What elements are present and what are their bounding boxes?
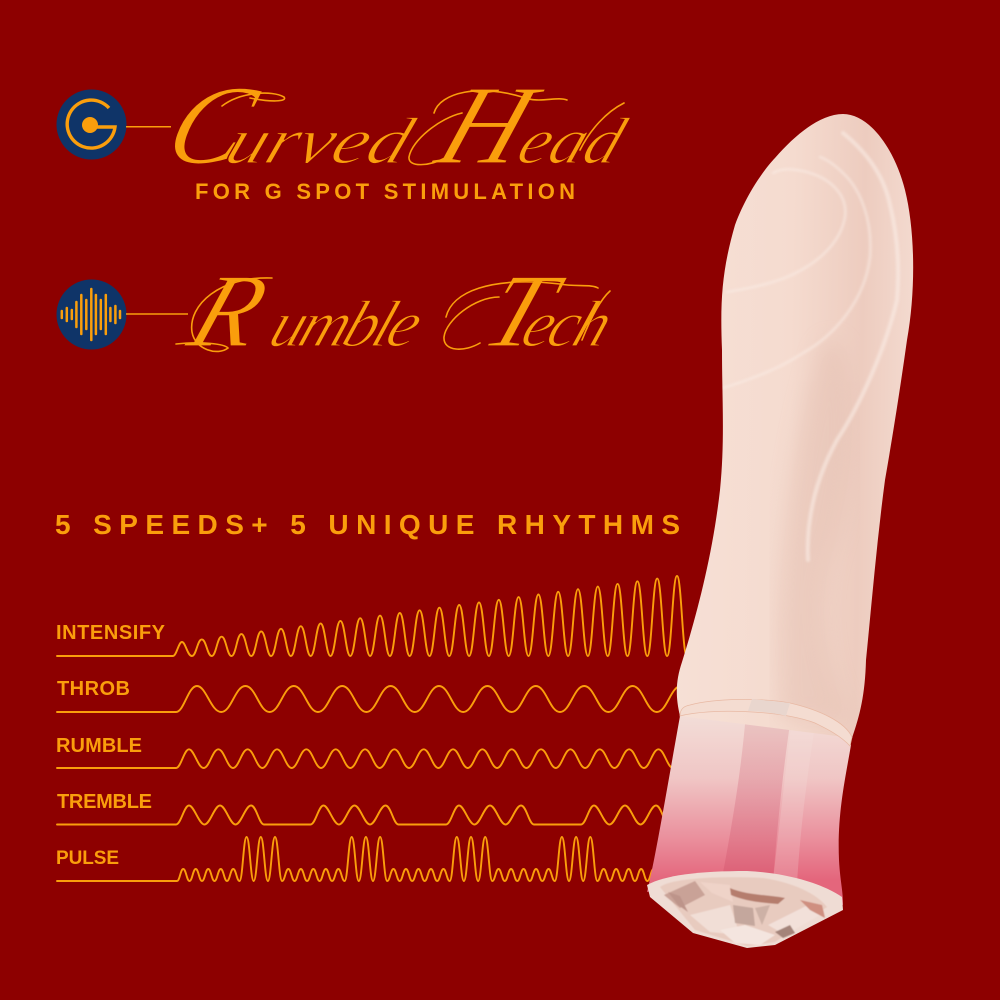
product collar: [680, 699, 852, 746]
waveform: rumble: [57, 749, 673, 768]
connector line: [126, 126, 171, 128]
feature: curved head: [56, 63, 651, 204]
chart: throb rhythm: [57, 678, 681, 712]
heading: Rumble Tech: ech: [513, 287, 624, 361]
label: pulse: PULSE: [56, 848, 119, 869]
heading: Rumble Tech: T: [470, 253, 577, 369]
chart: intensify rhythm: [56, 576, 687, 656]
product shaft: [677, 114, 913, 738]
icon: G spot badge: [56, 90, 126, 160]
heading: Rumble Tech: R: [175, 253, 282, 369]
heading: Rumble Tech: [175, 253, 636, 369]
icon: sound wave badge: [56, 280, 126, 350]
label: throb: THROB: [57, 678, 130, 700]
waveform: tremble: [57, 806, 669, 824]
chart: pulse rhythm: [56, 837, 660, 881]
waveform: intensify: [57, 576, 687, 656]
heading: Curved Head: H: [421, 63, 555, 188]
heading: Curved Head: urved: [217, 104, 425, 178]
chart: rumble rhythm: [56, 735, 673, 768]
label: tremble: TREMBLE: [57, 791, 152, 813]
label: rumble: RUMBLE: [56, 735, 142, 757]
gem end cap: [647, 871, 843, 948]
chart: tremble rhythm: [57, 791, 669, 824]
label: intensify: INTENSIFY: [56, 622, 166, 644]
heading: Curved Head: [151, 63, 651, 188]
waveform: throb: [57, 686, 681, 712]
product illustration: [647, 114, 913, 948]
heading: speeds and rhythms: 5 SPEEDS+ 5 UNIQUE RHYTHMS: [55, 509, 680, 540]
product base: [647, 709, 851, 905]
heading: Curved Head: ead: [509, 104, 636, 178]
subheading: FOR G SPOT STIMULATION: [195, 179, 575, 204]
connector line: [126, 313, 188, 315]
heading: Curved Head: C: [151, 63, 273, 188]
feature: rumble tech: [56, 253, 636, 369]
waveform: pulse: [57, 837, 660, 881]
heading: Rumble Tech: umble: [261, 287, 434, 361]
